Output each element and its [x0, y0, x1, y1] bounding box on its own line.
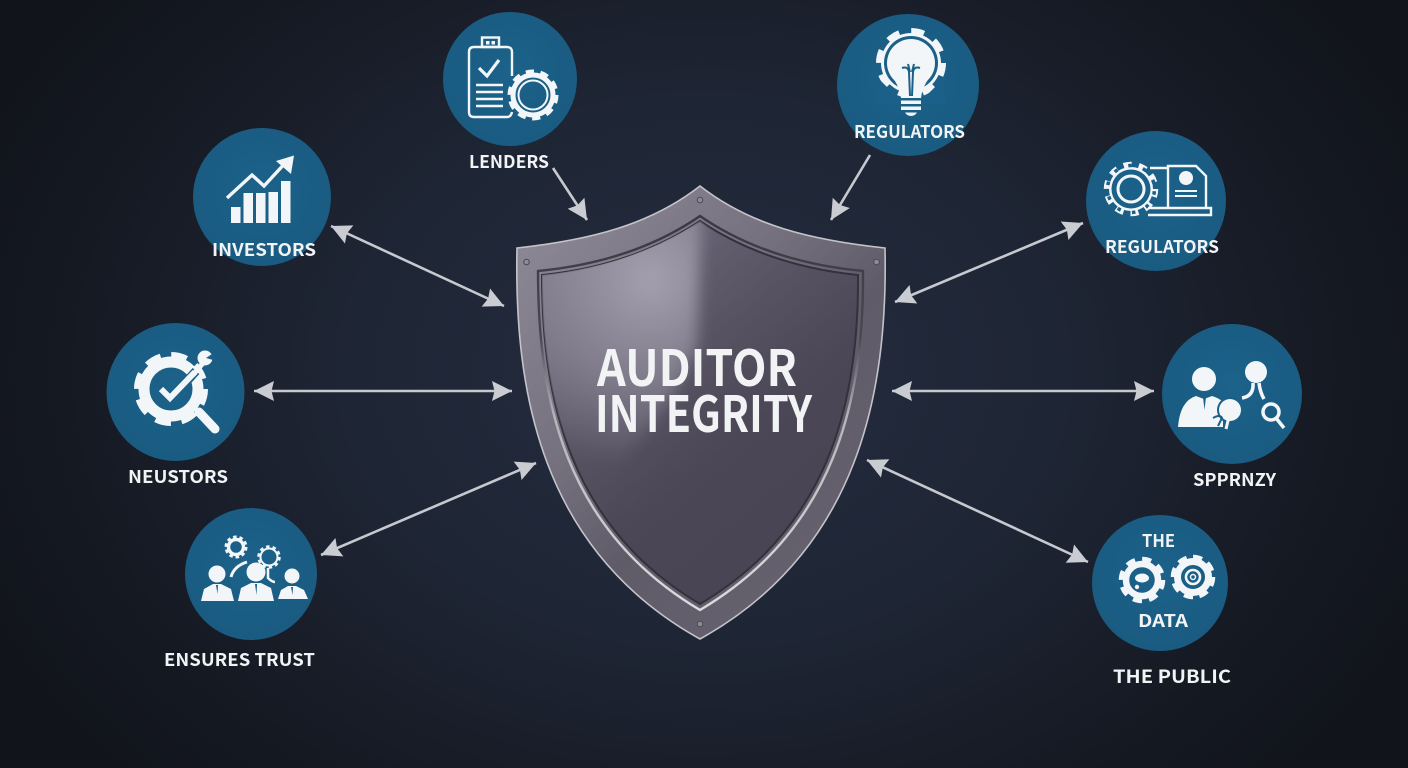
- node: data: [1092, 515, 1228, 651]
- node: regulators right: [1086, 131, 1226, 271]
- shield outer rim: [517, 186, 885, 639]
- arrow: neustors and shield: [254, 390, 512, 392]
- rivets: [524, 197, 879, 627]
- title: [595, 329, 813, 447]
- shield sheen: [542, 221, 710, 450]
- icon: rising bar chart: [227, 156, 294, 223]
- node: sprnzy: [1162, 324, 1302, 492]
- label: the: THE: [1142, 528, 1175, 553]
- shield face: [542, 221, 858, 604]
- central shield: [517, 186, 885, 639]
- arrow: top regulators to shield: [831, 155, 870, 220]
- icon: gear check wrench magnifier: [139, 350, 215, 429]
- node: regulators top: [837, 14, 979, 156]
- label: REGULATORS: [1105, 234, 1219, 259]
- icon: people and magnifiers: [1178, 361, 1284, 429]
- title: INTEGRITY: [595, 375, 813, 447]
- icon: light bulb gear: [876, 31, 946, 116]
- arrow: lenders to shield: [553, 168, 587, 220]
- node: ensures trust: [164, 508, 317, 672]
- label: data: DATA: [1138, 608, 1189, 633]
- node: investors: [193, 128, 331, 266]
- title: AUDITOR: [596, 329, 797, 401]
- label: REGULATORS: [854, 119, 965, 144]
- label: LENDERS: [469, 149, 549, 174]
- arrow: right regulators and shield: [895, 223, 1083, 302]
- icon: clipboard and gear: [469, 38, 556, 118]
- node: neustors: [106, 323, 244, 489]
- label: INVESTORS: [212, 237, 316, 262]
- icon: two gears: [1122, 558, 1212, 600]
- arrow: investors and shield: [331, 226, 504, 306]
- node: lenders: [443, 12, 577, 174]
- label: SPPRNZY: [1193, 467, 1277, 492]
- label: the public: THE PUBLIC: [1113, 663, 1231, 689]
- arrow: ensures trust and shield: [321, 463, 536, 555]
- label: ENSURES TRUST: [164, 647, 315, 672]
- label: NEUSTORS: [128, 464, 228, 489]
- shield inner groove: [538, 216, 863, 610]
- arrow: sprnzy and shield: [892, 390, 1154, 392]
- arrow: the public and shield: [867, 460, 1088, 562]
- icon: gear and document: [1107, 165, 1211, 215]
- icon: three people with gears: [201, 537, 308, 601]
